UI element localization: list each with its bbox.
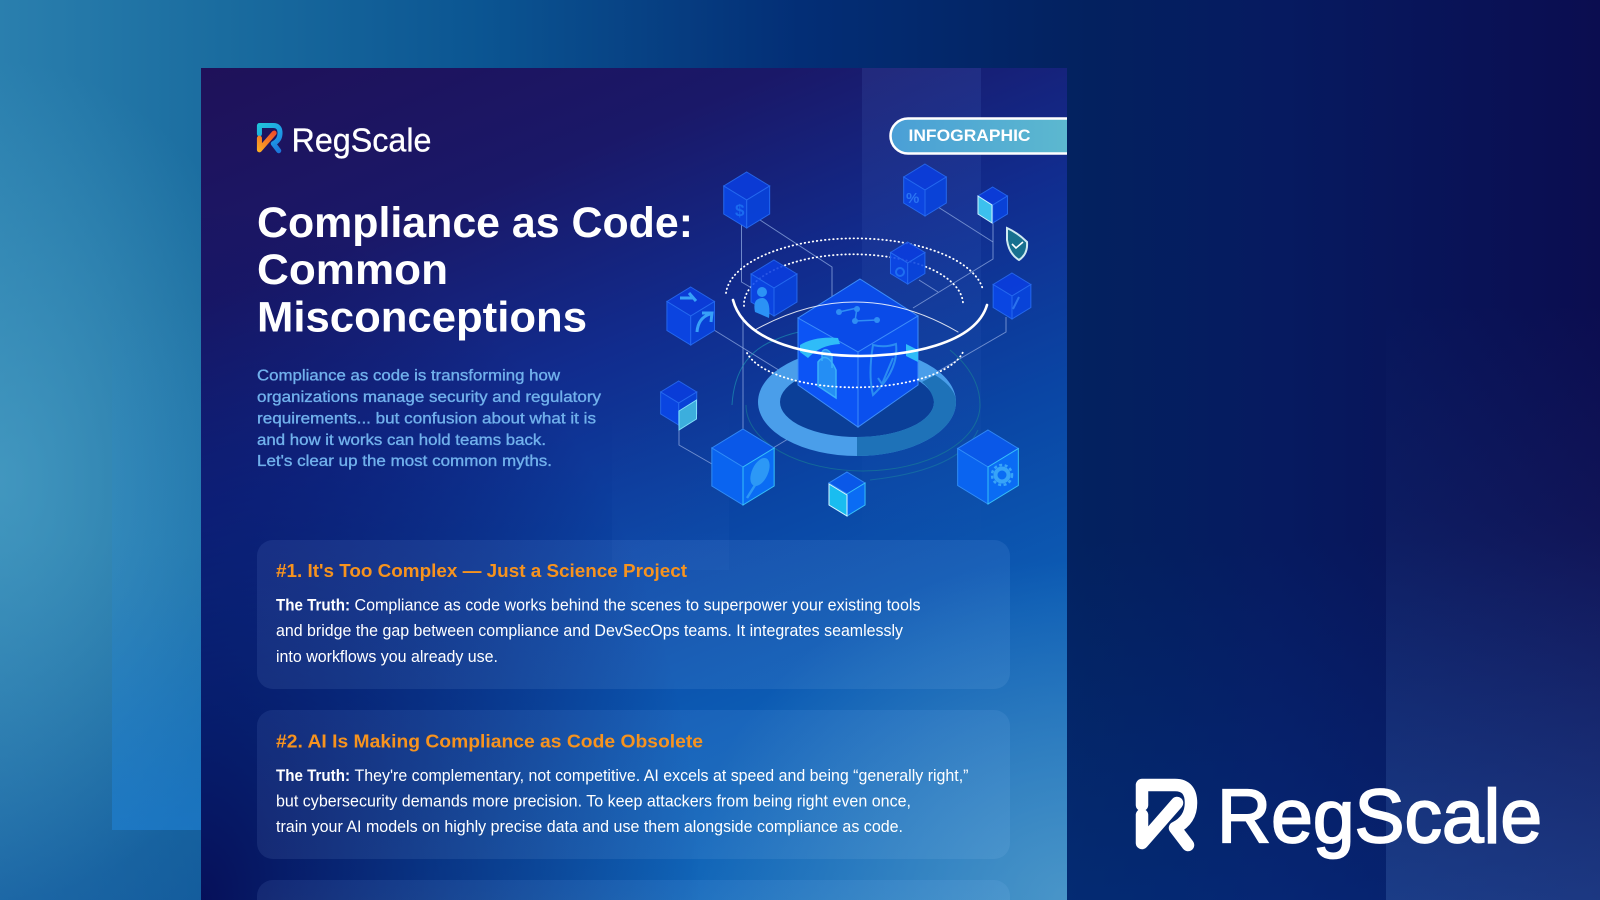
body text: The Truth: (276, 767, 350, 785)
cube: small cyan face (978, 187, 1007, 223)
glow arcs (732, 330, 980, 480)
cube: small cyan left face lower (829, 472, 865, 516)
white halo ring (733, 300, 987, 356)
cube: small cyan right face (661, 381, 697, 430)
background accent band right (1386, 300, 1600, 900)
intro paragraph (257, 368, 601, 470)
connector lines (679, 207, 1006, 467)
title: Compliance as Code: (257, 199, 693, 247)
body text: but cybersecurity demands more precision. To keep attackers from being right even once, (276, 792, 911, 810)
intro paragraph: Let's clear up the most common myths. (257, 453, 552, 470)
illustration: isometric compliance cubes (661, 164, 1031, 516)
body text: and bridge the gap between compliance and DevSecOps teams. It integrates seamlessly (276, 622, 904, 640)
body text: Compliance as code works behind the scenes to superpower your existing tools (354, 596, 920, 614)
background accent band left (112, 300, 201, 830)
logo: RegScale small (259, 122, 432, 158)
cube: leaf (712, 429, 774, 505)
badge: INFOGRAPHIC: INFOGRAPHIC (908, 127, 1031, 145)
heading: #1. It's Too Complex — Just a Science Project (276, 561, 687, 581)
cube: percent: % (906, 190, 919, 207)
intro paragraph: requirements... but confusion about what it is (257, 410, 596, 428)
icon: RegScale mark white (1142, 785, 1191, 845)
body text: They're complementary, not competitive. AI excels at speed and being “generally right,” (354, 767, 968, 785)
dotted orbit ring lower (747, 352, 963, 387)
logo: RegScale large white (1142, 774, 1542, 860)
cube: gear (958, 430, 1018, 504)
cube: central (798, 279, 918, 427)
body text: into workflows you already use. (276, 648, 498, 666)
body text: train your AI models on highly precise data and use them alongside compliance as code. (276, 818, 903, 836)
body text (276, 596, 920, 666)
cube: percent (904, 164, 946, 216)
intro paragraph: organizations manage security and regulatory (257, 389, 601, 406)
card 2: AI obsolete (257, 710, 1010, 859)
wordmark: RegScale (1217, 774, 1542, 860)
cube: check (993, 273, 1031, 319)
cube: person (751, 260, 797, 318)
heading: #2. AI Is Making Compliance as Code Obsolete (276, 732, 703, 752)
title (257, 199, 693, 342)
title: Common (257, 246, 448, 294)
shield check (1012, 242, 1023, 248)
intro paragraph: Compliance as code is transforming how (257, 368, 561, 384)
cube: dollar (724, 172, 770, 228)
ring: base donut (758, 348, 956, 456)
cube: arrows (667, 287, 714, 345)
ring: base donut dark section (857, 375, 956, 456)
title: Misconceptions (257, 294, 587, 342)
intro paragraph: and how it works can hold teams back. (257, 432, 546, 449)
shield icon (1007, 228, 1027, 260)
dotted orbit rings (726, 238, 983, 306)
badge: INFOGRAPHIC (890, 118, 1067, 154)
body text (276, 767, 968, 836)
icon: RegScale mark colour (259, 126, 280, 151)
panel: infographic page preview (201, 68, 1067, 900)
card 1: too complex (257, 540, 1010, 689)
cube: dollar: $ (735, 201, 745, 220)
wordmark: RegScale (292, 122, 432, 158)
body text: The Truth: (276, 596, 350, 614)
card 3: cropped (257, 880, 1010, 900)
ring: base donut inner (779, 366, 935, 438)
cube: phone (890, 242, 925, 284)
